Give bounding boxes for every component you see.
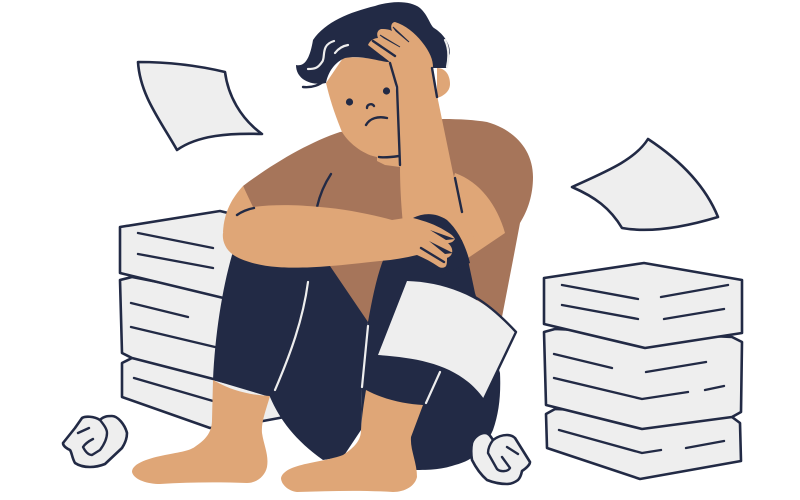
ball creases	[488, 440, 518, 471]
face	[346, 87, 390, 125]
right stack: top ream	[544, 263, 742, 348]
paper stack: left	[120, 211, 290, 428]
nose	[367, 104, 374, 108]
folded arm and hand	[223, 205, 455, 268]
left leg and foot	[132, 380, 270, 484]
head	[326, 57, 400, 158]
left stack: middle ream	[120, 277, 240, 382]
left shoulder skin	[223, 186, 253, 232]
neck	[377, 150, 400, 167]
ball outline	[63, 416, 127, 467]
paper stack: right	[544, 263, 742, 479]
left stack: text lines	[131, 233, 215, 401]
ball outline	[471, 433, 530, 484]
hair lines	[303, 40, 448, 87]
shirt	[243, 119, 533, 340]
eye right	[383, 87, 390, 95]
crumpled paper ball: left	[63, 416, 127, 467]
paper edge	[475, 297, 516, 399]
arm line	[237, 208, 254, 215]
mouth	[366, 117, 387, 125]
flying paper: top right	[572, 139, 718, 230]
right arm upper skin	[440, 173, 505, 258]
eye left	[346, 98, 353, 106]
left stack: bottom ream	[122, 358, 290, 428]
right stack: text lines	[554, 285, 728, 453]
right leg and foot	[281, 390, 423, 492]
trouser highlight lines	[275, 282, 440, 403]
paper fill	[378, 281, 516, 399]
forearm outline lines	[373, 27, 462, 212]
right stack: bottom ream	[546, 409, 741, 479]
flying paper: top left	[138, 62, 262, 150]
hair	[296, 2, 450, 84]
knee behind hand	[413, 214, 470, 275]
ear	[437, 68, 450, 98]
raised forearm and hand	[368, 22, 475, 240]
left leg trousers	[213, 240, 368, 460]
ball creases	[78, 420, 107, 455]
person	[132, 2, 533, 492]
right leg trousers	[361, 214, 500, 470]
right stack: middle ream	[544, 329, 742, 429]
left stack: top ream	[120, 211, 240, 302]
sleeve seam	[317, 174, 331, 207]
paper on knee	[378, 281, 516, 399]
finger lines	[421, 230, 455, 262]
crumpled paper ball: right	[471, 433, 530, 484]
